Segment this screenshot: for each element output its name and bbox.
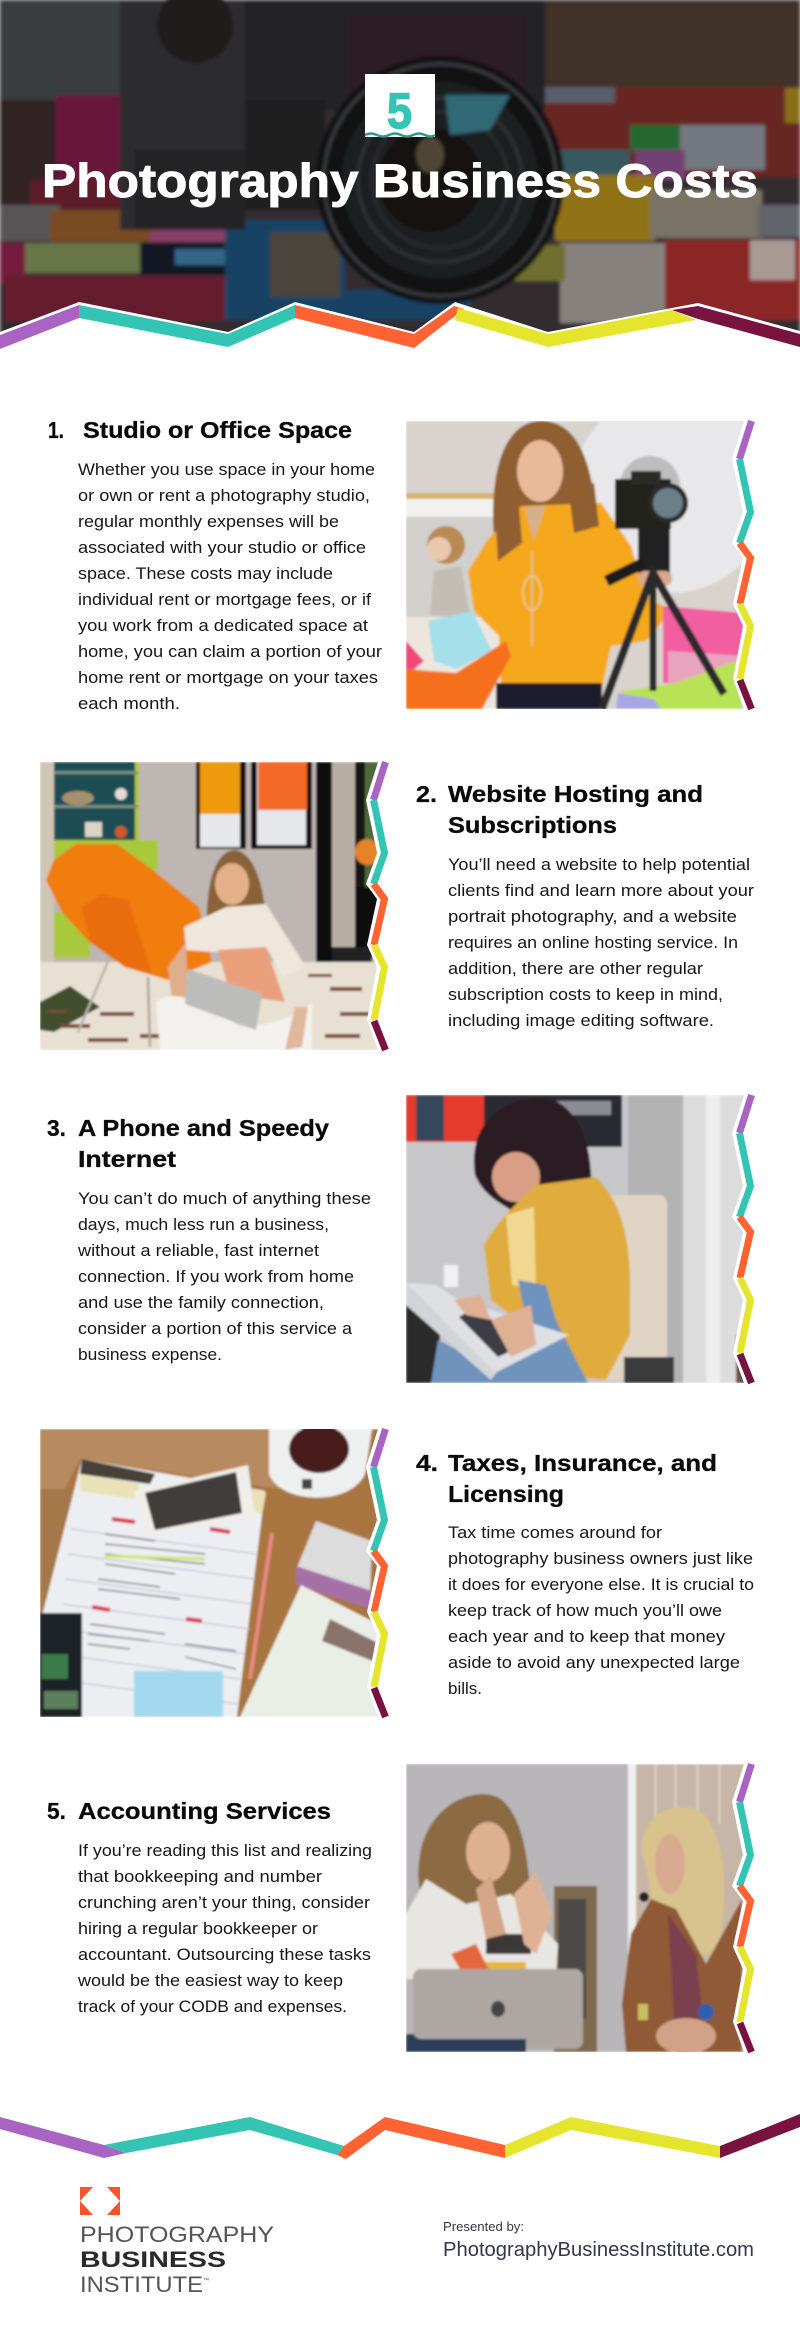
section 4 body text: Tax time comes around for	[448, 1524, 663, 1542]
section 4 body text: keep track of how much you’ll owe	[448, 1602, 722, 1620]
strip: colored zigzag edge	[732, 419, 770, 709]
section 4 heading: Licensing	[448, 1481, 564, 1507]
section 2 body text: You’ll need a website to help potential	[448, 856, 750, 874]
logo: Photography Business Institute: ™	[203, 2277, 209, 2284]
section 5 body text	[77, 1842, 372, 2016]
section 4 body text: bills.	[448, 1680, 482, 1698]
section 4 heading	[416, 1450, 717, 1507]
section 3 body text: without a reliable, fast internet	[77, 1242, 319, 1260]
section 4 body text: aside to avoid any unexpected large	[448, 1654, 740, 1672]
number badge: 5: 5	[387, 83, 412, 139]
section 3 body text: and use the family connection,	[78, 1294, 324, 1312]
section 3 body text: days, much less run a business,	[78, 1216, 329, 1234]
logo: Photography Business Institute	[80, 2187, 274, 2297]
section 1: studio or office space	[49, 420, 755, 710]
section 5 body text: If you’re reading this list and realizing	[78, 1842, 372, 1860]
section 3 body text: business expense.	[78, 1346, 222, 1364]
strip: colored zigzag edge	[366, 760, 404, 1050]
section 3 body text: consider a portion of this service a	[78, 1320, 353, 1338]
section 5 body text: track of your CODB and expenses.	[78, 1998, 347, 2016]
section 3 heading: A Phone and Speedy	[78, 1115, 329, 1141]
photo: photographer with camera on tripod	[406, 420, 755, 710]
hero zigzag divider	[0, 302, 800, 360]
section 5: accounting services	[47, 1762, 770, 2054]
photo: woman with laptop on orange chair	[40, 760, 404, 1050]
section 5 body text: hiring a regular bookkeeper or	[78, 1920, 319, 1938]
presented by credit	[443, 2219, 754, 2261]
section 1 body text	[78, 461, 383, 713]
section 2 heading	[416, 781, 703, 838]
section 1 body text: home rent or mortgage on your taxes	[78, 669, 378, 687]
title: Photography Business Costs	[42, 154, 758, 207]
section 1 body text: Whether you use space in your home	[78, 461, 375, 479]
section 5 heading: Accounting Services	[78, 1798, 331, 1824]
number badge: 5	[365, 74, 435, 139]
strip: colored zigzag edge	[366, 1427, 404, 1717]
section 1 body text: home, you can claim a portion of your	[78, 643, 383, 661]
section 1 heading: Studio or Office Space	[83, 417, 352, 443]
section 1 body text: regular monthly expenses will be	[78, 513, 339, 531]
section 2 heading: Subscriptions	[448, 812, 617, 838]
presented by credit: PhotographyBusinessInstitute.com	[443, 2239, 754, 2261]
section 4 body text: each year and to keep that money	[448, 1628, 726, 1646]
section 4 body text	[448, 1524, 754, 1698]
section 2 body text: requires an online hosting service. In	[448, 934, 738, 952]
icon: orange brackets logo mark	[80, 2187, 120, 2215]
section 2 body text: subscription costs to keep in mind,	[448, 986, 723, 1004]
section 3 body text: connection. If you work from home	[78, 1268, 354, 1286]
section 4 heading: 4.	[416, 1450, 438, 1476]
presented by credit: Presented by:	[443, 2219, 524, 2234]
section 1 body text: each month.	[78, 695, 180, 713]
section 5 body text: crunching aren’t your thing, consider	[78, 1894, 371, 1912]
section 2: website hosting and subscriptions	[40, 760, 755, 1050]
logo: Photography Business Institute: INSTITUTE	[80, 2272, 203, 2297]
section 4 body text: it does for everyone else. It is crucial to	[448, 1576, 754, 1594]
section 2 body text: clients find and learn more about your	[448, 882, 755, 900]
section 4 body text: photography business owners just like	[448, 1550, 753, 1568]
section 5 heading: 5.	[47, 1798, 66, 1824]
section 3 body text: You can’t do much of anything these	[78, 1190, 371, 1208]
strip: colored zigzag edge	[732, 1093, 770, 1383]
photo: to-do list, phone and coffee on desk	[40, 1425, 404, 1717]
section 1 body text: individual rent or mortgage fees, or if	[78, 591, 371, 609]
section 1 heading: 1.	[48, 417, 64, 443]
section 5 body text: accountant. Outsourcing these tasks	[78, 1946, 371, 1964]
section 3 body text	[77, 1190, 371, 1364]
section 5 body text: would be the easiest way to keep	[77, 1972, 343, 1990]
section 1 body text: associated with your studio or office	[78, 539, 366, 557]
section 4 heading: Taxes, Insurance, and	[448, 1450, 717, 1476]
section 3 heading	[47, 1115, 329, 1172]
hero banner: camera photo	[0, 0, 800, 352]
section 3: a phone and speedy internet	[47, 1093, 770, 1383]
logo: Photography Business Institute: BUSINESS	[80, 2247, 226, 2272]
footer zigzag divider	[0, 2114, 800, 2159]
section 2 body text	[448, 856, 755, 1030]
section 2 body text: addition, there are other regular	[448, 960, 704, 978]
section 1 body text: you work from a dedicated space at	[78, 617, 368, 635]
section 5 body text: that bookkeeping and number	[78, 1868, 323, 1886]
section 1 body text: space. These costs may include	[78, 565, 333, 583]
photo: woman typing on laptop	[406, 1093, 770, 1383]
photo: two women talking over a laptop	[406, 1762, 770, 2054]
section 2 body text: portrait photography, and a website	[448, 908, 737, 926]
section 2 heading: 2.	[416, 781, 437, 807]
logo: Photography Business Institute: PHOTOGRAPHY	[80, 2222, 274, 2247]
section 2 body text: including image editing software.	[448, 1012, 714, 1030]
section 4: taxes, insurance, and licensing	[40, 1425, 754, 1717]
section 1 body text: or own or rent a photography studio,	[78, 487, 370, 505]
section 3 heading: Internet	[78, 1146, 176, 1172]
section 2 heading: Website Hosting and	[448, 781, 703, 807]
section 3 heading: 3.	[47, 1115, 66, 1141]
strip: colored zigzag edge	[732, 1762, 770, 2052]
